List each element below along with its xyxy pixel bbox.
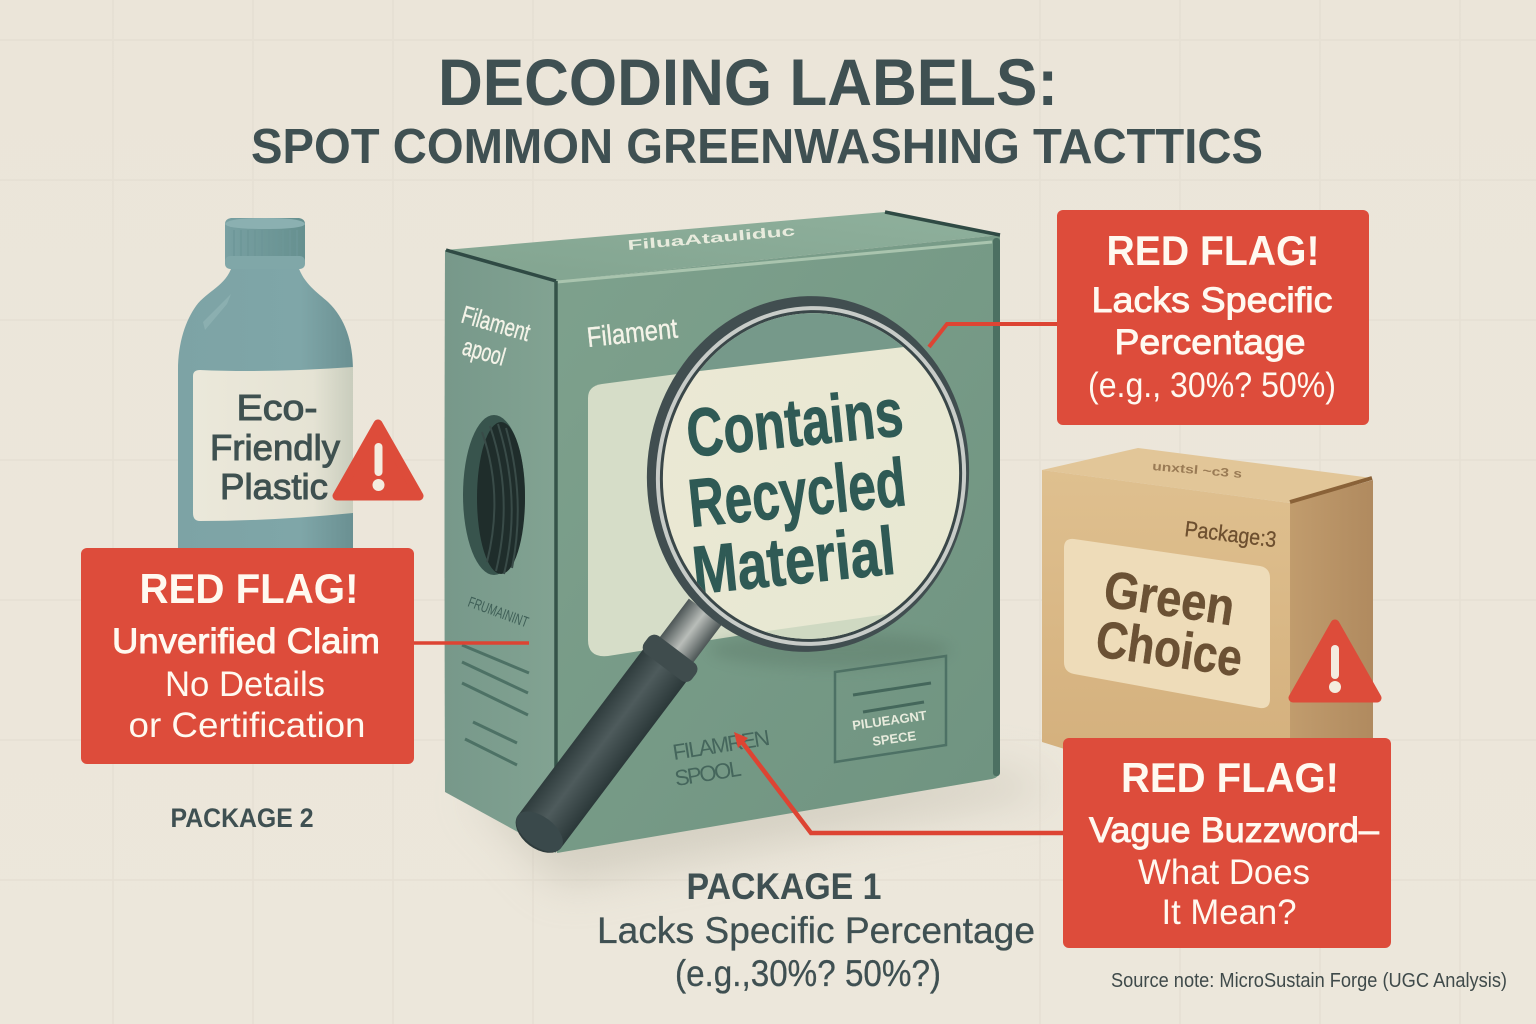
carton label bbox=[1064, 539, 1270, 708]
lens rim bbox=[632, 283, 984, 665]
carton label: Green bbox=[1100, 561, 1238, 637]
callout: lacks specific percentage: Lacks Specific bbox=[1092, 281, 1332, 320]
filament spool text: SPOOL bbox=[673, 756, 743, 791]
callout: unverified claim: Unverified Claim bbox=[112, 622, 380, 661]
callout: lacks specific percentage: (e.g., 30%? 50%) bbox=[1088, 366, 1336, 405]
carton: package 3 bbox=[1042, 448, 1377, 760]
callout: vague buzzword: It Mean? bbox=[1162, 893, 1296, 932]
bottle highlight bbox=[203, 294, 231, 330]
spec stamp: SPECE bbox=[871, 728, 917, 749]
carton label: Choice bbox=[1092, 610, 1246, 688]
callout: unverified claim: RED FLAG! bbox=[140, 565, 358, 612]
package 1 caption: Lacks Specific Percentage bbox=[597, 910, 1035, 951]
bottle label bbox=[193, 367, 353, 521]
callout: lacks specific percentage: RED FLAG! bbox=[1106, 227, 1320, 274]
label window bbox=[588, 345, 895, 656]
bottle cap bbox=[225, 218, 305, 269]
carton side bbox=[1290, 480, 1373, 740]
title: SPOT COMMON GREENWASHING TACTTICS bbox=[251, 120, 1263, 174]
warning icon: carton bbox=[1293, 624, 1377, 698]
source note: Source note: MicroSustain Forge (UGC Analysis) bbox=[1111, 970, 1507, 992]
carton top bbox=[1042, 448, 1372, 503]
box front bbox=[557, 235, 1000, 853]
box top bbox=[445, 212, 1000, 281]
package 2 caption: PACKAGE 2 bbox=[170, 803, 314, 833]
callout: vague buzzword: Vague Buzzword– bbox=[1089, 811, 1380, 850]
connector: package 1 box bbox=[929, 324, 1057, 347]
box left side: apool bbox=[459, 333, 508, 372]
bottle label: Eco- bbox=[236, 387, 318, 428]
handle bbox=[505, 593, 730, 863]
callout: vague buzzword bbox=[1063, 738, 1391, 948]
box text: filament: Filament bbox=[585, 313, 679, 353]
box left side: FRUMAININT bbox=[466, 594, 531, 631]
magnifying glass bbox=[505, 283, 984, 863]
filament spool text bbox=[671, 725, 772, 791]
callout: lacks specific percentage: Percentage bbox=[1114, 323, 1306, 362]
lens contents bbox=[662, 313, 960, 639]
callout: vague buzzword: What Does bbox=[1138, 853, 1310, 892]
callout: vague buzzword: RED FLAG! bbox=[1121, 754, 1339, 801]
spool hole bbox=[463, 415, 525, 575]
bottle label: Plastic bbox=[220, 466, 328, 507]
callout: unverified claim: or Certification bbox=[128, 706, 366, 745]
title bbox=[251, 45, 1263, 174]
spec stamp: PILUEAGNT bbox=[851, 708, 928, 733]
filament spool text: FILAMREN bbox=[671, 725, 772, 765]
bottle body bbox=[178, 266, 353, 548]
carton front bbox=[1042, 470, 1290, 760]
lens contents: Contains bbox=[683, 374, 906, 472]
package 1 caption: (e.g.,30%? 50%?) bbox=[675, 953, 941, 994]
box left side: Filament bbox=[458, 301, 533, 347]
lens contents: Material bbox=[689, 513, 898, 609]
main filament box: package 1 bbox=[444, 212, 1060, 885]
box left side bbox=[444, 250, 556, 853]
main filament box: package 1: FiluaAtauliduc bbox=[627, 222, 796, 253]
package 1 caption: PACKAGE 1 bbox=[686, 866, 882, 907]
callout: unverified claim bbox=[81, 548, 414, 764]
warning icon: bottle bbox=[337, 424, 419, 496]
box shadow bbox=[470, 770, 1060, 885]
lens contents: Recycled bbox=[685, 444, 909, 542]
spec stamp bbox=[835, 656, 946, 762]
callout: unverified claim: No Details bbox=[165, 665, 325, 704]
title: DECODING LABELS: bbox=[438, 45, 1058, 119]
carton: package 3: unxtsl ~c3 s bbox=[1152, 459, 1243, 481]
connector: package 2 bbox=[413, 641, 529, 645]
carton: package 3: Package:3 bbox=[1183, 516, 1278, 552]
connector: package 3 bbox=[734, 732, 1063, 833]
bottle label: Friendly bbox=[210, 427, 340, 468]
bottle: package 2 bbox=[178, 218, 419, 548]
callout: lacks specific percentage bbox=[1057, 210, 1369, 425]
package 1 caption bbox=[597, 866, 1035, 994]
